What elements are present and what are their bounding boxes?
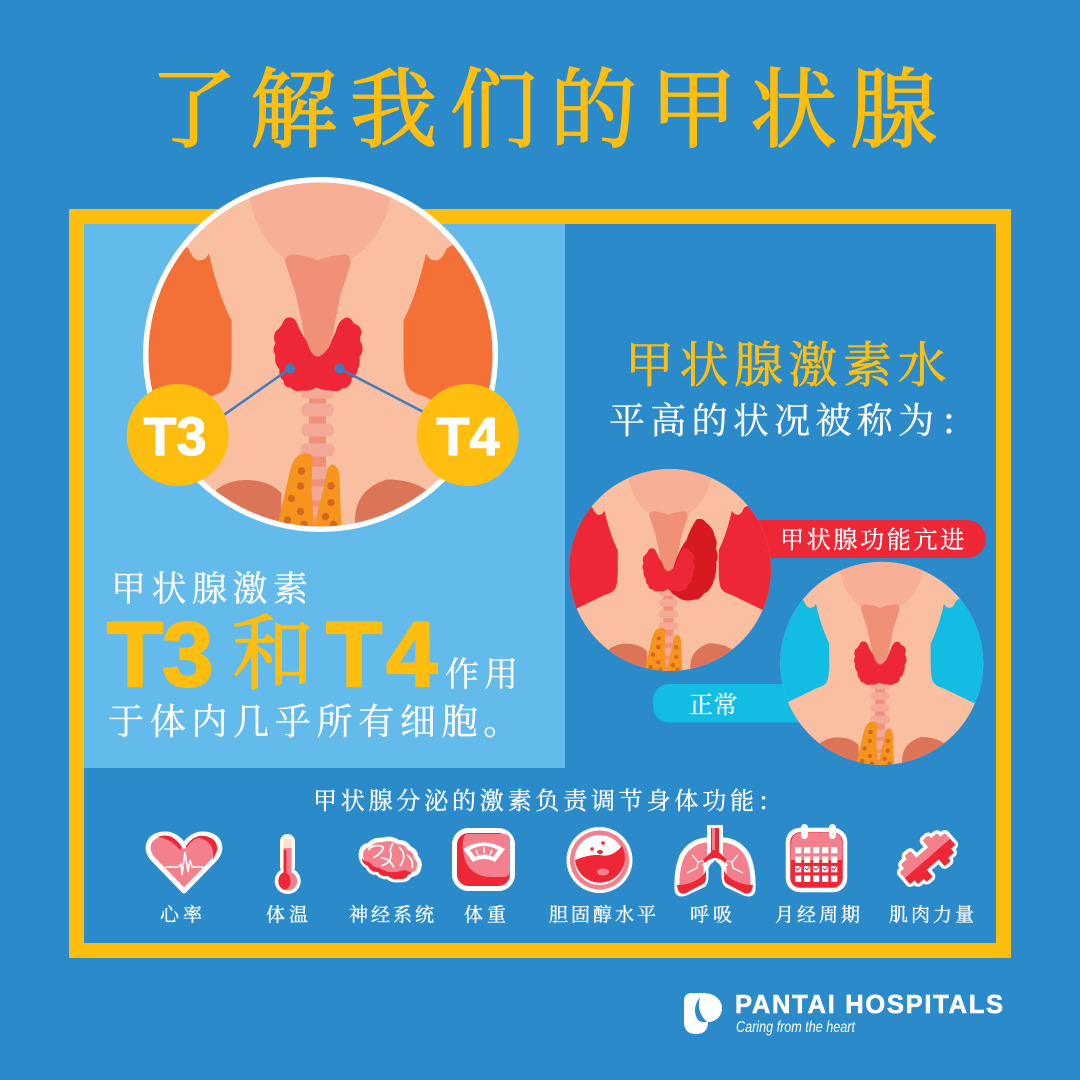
badge: T4 <box>417 384 519 486</box>
line: almost all cells in the body: 于体内几乎所有细胞。 <box>108 702 525 742</box>
panel: yellow frame <box>76 216 1004 950</box>
label: nervous system: 神经系统 <box>349 904 437 926</box>
circle: normal neck <box>780 562 984 765</box>
label: menstrual cycle: 月经周期 <box>775 904 863 926</box>
panel: light blue hormones panel <box>84 224 565 768</box>
label: heart rate: 心率 <box>160 904 206 926</box>
line: thyroid hormones: 甲状腺激素 <box>111 570 314 609</box>
heading: hormone level: 甲状腺激素水 <box>625 338 952 393</box>
pill: normal label: 正常 <box>689 692 738 719</box>
line: act on: 作用 <box>445 656 523 694</box>
label: cholesterol level: 胆固醇水平 <box>549 904 659 926</box>
pill: hyperthyroidism label <box>700 520 986 558</box>
label: and: 和 <box>232 609 314 700</box>
icon row <box>148 824 977 926</box>
logo: Pantai Hospitals <box>684 991 1003 1036</box>
title: 了解我们的甲状腺 <box>150 62 950 159</box>
icon: weighing scale <box>454 830 512 888</box>
text block: T3 and T4 act on almost all cells <box>107 570 525 742</box>
icon: brain <box>361 839 420 880</box>
badge: T3: T3 <box>143 407 207 467</box>
label: body weight: 体重 <box>464 904 510 926</box>
pill: hyperthyroidism label: 甲状腺功能亢进 <box>780 527 967 554</box>
label: T3: T3 <box>107 604 212 706</box>
label: T4: T4 <box>326 604 441 706</box>
pill: normal label <box>653 684 833 722</box>
badge: T4: T4 <box>436 407 500 467</box>
icon: thermometer <box>275 834 301 894</box>
icon: heart rate <box>148 834 220 891</box>
icon: dumbbell <box>894 826 961 891</box>
label: body temperature: 体温 <box>266 904 312 926</box>
wordmark: PANTAI HOSPITALS <box>735 991 1003 1019</box>
circle: neck close-up <box>143 177 498 532</box>
icon: lungs <box>677 825 753 894</box>
illustration: neck with thyroid and T3 T4 <box>110 174 524 534</box>
text block: functions regulated by thyroid hormones: 甲状腺分泌的激素负责调节身体功能: <box>313 785 771 815</box>
label: breathing: 呼吸 <box>690 904 736 926</box>
text block: conditions called: 平高的状况被称为: <box>609 397 960 442</box>
tagline: Caring from the heart <box>736 1019 855 1036</box>
badge: T3 <box>127 384 229 486</box>
icon: cholesterol <box>566 827 632 893</box>
icon: logo mark <box>684 993 722 1034</box>
icon: calendar <box>788 824 845 890</box>
label: muscle strength: 肌肉力量 <box>889 904 977 926</box>
circle: hyperthyroidism neck <box>569 469 771 671</box>
